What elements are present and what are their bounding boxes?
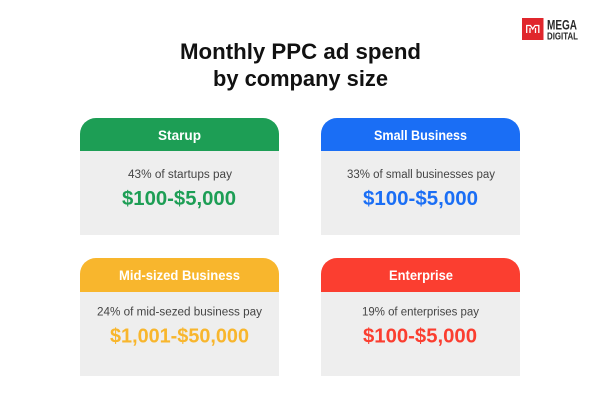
logo: Mega Digital: MEGA <box>547 17 577 32</box>
panel: enterprise: Enterprise <box>389 268 453 283</box>
panel: startup: 43% of startups pay <box>128 169 232 181</box>
panel: mid-sized business: Mid-sized Business <box>119 268 240 283</box>
logo: Mega Digital: DIGITAL <box>547 31 578 42</box>
panel: enterprise: 19% of enterprises pay <box>362 307 479 319</box>
panel: startup: $100-$5,000 <box>122 187 236 210</box>
title: Monthly PPC ad spend <box>180 39 421 64</box>
panel: startup: Starup <box>158 128 201 143</box>
panel: small business: 33% of small businesses pay <box>347 169 495 181</box>
panel: mid-sized business: 24% of mid-sezed business pay <box>97 307 262 319</box>
panel: enterprise <box>321 258 520 376</box>
panel: enterprise: $100-$5,000 <box>363 324 477 348</box>
title <box>180 39 421 91</box>
title: by company size <box>213 66 388 91</box>
panel: small business <box>321 118 520 235</box>
panel: mid-sized business <box>80 258 279 376</box>
panel: mid-sized business: $1,001-$50,000 <box>110 324 249 348</box>
logo: Mega Digital <box>522 17 578 42</box>
panel: startup <box>80 118 279 235</box>
panel: small business: $100-$5,000 <box>363 187 478 210</box>
panel: small business: Small Business <box>374 128 467 143</box>
